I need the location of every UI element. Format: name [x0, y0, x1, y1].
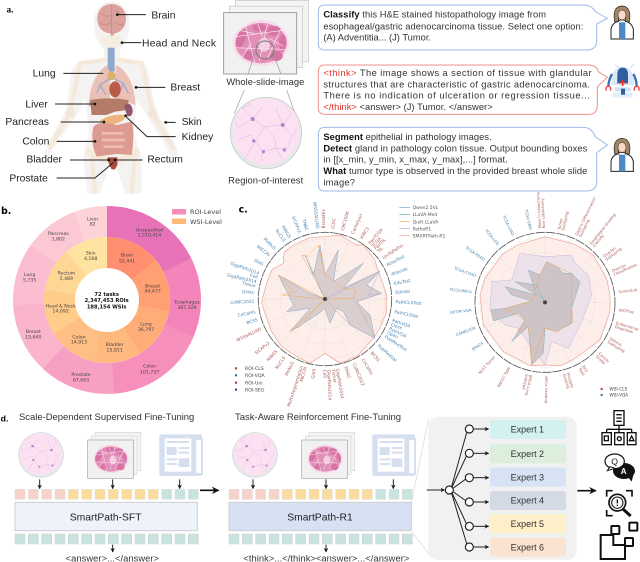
- panel label d: d.: [1, 413, 8, 423]
- radial task labels: PathCLSTest: [395, 299, 422, 307]
- donut labels: 36,797: [138, 327, 154, 333]
- radial task labels: Grade: [595, 354, 607, 366]
- radial task labels: TumorSub: [617, 287, 638, 294]
- prompt bubble: classify: Classify this H&E stained histopathology image from: [323, 10, 546, 20]
- response bubble: think: There is no indication of ulceration or regression tissue...: [323, 91, 590, 101]
- expert panel: Expert 1: [511, 425, 544, 435]
- donut labels: 82: [90, 222, 96, 228]
- organ labels with leader lines: Skin: [182, 117, 202, 128]
- radial task labels: OPTIM VQA: [450, 307, 472, 315]
- expert panel: [427, 417, 577, 560]
- title: scale-dependent supervised fine-tuning: Scale-Dependent Supervised Fine-Tuning: [19, 412, 194, 423]
- radial task labels: Open: [386, 330, 399, 340]
- task type legend: ROI-VQA: [245, 373, 266, 379]
- donut labels: Unspecified: [136, 228, 163, 234]
- radial task labels: Subtype: [521, 374, 530, 391]
- radial task labels: PLCO-BRCA: [450, 287, 472, 294]
- prompt bubble: segment, detect, what: Detect gland in pathology colon tissue. Output bounding boxes: [323, 143, 588, 153]
- radial task labels: GigaPath2014: [334, 368, 344, 399]
- model legend: PathoR1: [413, 226, 431, 232]
- organ labels with leader lines: Colon: [22, 137, 50, 148]
- prompt bubble: classify: (A) Adventitia... (J) Tumor.: [323, 33, 431, 43]
- title: task-aware reinforcement fine-tuning: Task-Aware Reinforcement Fine-Tuning: [235, 412, 401, 423]
- radial task labels: TCGA-READ: [464, 245, 486, 262]
- organ labels with leader lines: Kidney: [182, 132, 214, 143]
- whole-slide-image stack: Whole-slide-image: [226, 77, 304, 87]
- donut center text: [75, 269, 138, 331]
- donut labels: Esophagus: [174, 300, 200, 306]
- prompt bubble: segment, detect, what: image?: [323, 177, 355, 187]
- donut labels: 4,168: [84, 256, 97, 262]
- expert panel: Expert 6: [511, 542, 544, 552]
- prompt bubble: classify: esophageal/gastric adenocarcinoma tissue. Select one option:: [323, 21, 583, 31]
- donut labels: [23, 217, 200, 383]
- radial task labels: Cancer: [598, 351, 611, 364]
- task type legend: WSI-CLS: [609, 387, 628, 393]
- radial task labels: BRCA Lung: [524, 375, 534, 396]
- donut center text: 72 tasks: [94, 292, 119, 298]
- response bubble: think: </think> <answer> (J) Tumor. </answer>: [323, 102, 493, 112]
- model legend: [399, 205, 446, 239]
- panel label c: c.: [239, 205, 248, 216]
- stage: SmartPath-SFT: SmartPath-SFT: [70, 512, 142, 523]
- radial task labels: MICCAI: [255, 244, 271, 258]
- donut outer ring: ROI-level: [0, 189, 218, 411]
- expert panel: Expert 3: [511, 472, 544, 482]
- task type legend: ROI-Uni: [245, 380, 263, 386]
- radial task labels: RINGS: [266, 349, 279, 363]
- radial task labels: Mass in Lobectomy: [535, 192, 542, 229]
- panel b: donut chart: [0, 189, 222, 411]
- radial task labels: NLST Tumor: [477, 354, 497, 375]
- region of interest circle: Region-of-interest: [228, 176, 304, 186]
- radial task labels: RINGS: [280, 225, 292, 240]
- panel label a: a.: [7, 5, 13, 15]
- icon: medical robot: [606, 64, 639, 98]
- model legend: SMARTPath-R1: [413, 233, 446, 239]
- icon: doctor: [611, 6, 633, 39]
- donut labels: Rectum: [57, 271, 76, 277]
- icon: classification hierarchy: [602, 411, 636, 445]
- radial task labels: GigaPath2014: [226, 273, 257, 285]
- panel a: anatomy and data: [5, 0, 308, 193]
- radial task labels: TIL: [375, 245, 385, 255]
- prompt bubble: segment, detect, what: in [[x_min, y_min, x_max, y_max],...] format.: [323, 155, 508, 165]
- icon: doctor: [611, 138, 633, 171]
- panel c: right radar chart: [450, 191, 639, 404]
- model legend: Qwen2.5VL: [413, 205, 439, 211]
- donut labels: 14,913: [71, 339, 87, 345]
- radial task labels: Cell: [249, 272, 258, 281]
- model legend: LLaVA-Med: [413, 212, 437, 218]
- radial task labels: Subtyping: [604, 246, 623, 262]
- radial task labels: Camelyon: [350, 213, 365, 235]
- response bubble: think: <think> The image shows a section of tissue with glandular: [323, 68, 592, 78]
- radial task labels: PanTIL: [374, 238, 387, 251]
- radial task labels: IHCProg: [618, 307, 635, 314]
- donut labels: 5,735: [23, 277, 36, 283]
- radial task labels: BCSS: [246, 317, 259, 326]
- donut labels: Bladder: [106, 342, 124, 348]
- radial task labels: Tumor: [556, 218, 564, 230]
- organ labels with leader lines: Prostate: [9, 173, 48, 184]
- radial task labels: Type: [577, 366, 587, 377]
- radial task labels: AtlasTest: [386, 254, 406, 268]
- icon: question and answer: [605, 454, 635, 482]
- radial task labels: GlaS: [253, 258, 265, 268]
- radial task labels: SICAPv2: [290, 215, 302, 234]
- panel label b: b.: [1, 206, 11, 217]
- radial task labels: PanTCGA: [368, 228, 385, 246]
- stage: SmartPath-SFT: [15, 432, 202, 562]
- radial task labels: MoNuSegmentation: [286, 365, 305, 408]
- radial task labels: Classify: [592, 233, 605, 248]
- radial task labels: NSCLC Type: [496, 365, 511, 388]
- radial task labels: CAMELYON: [455, 325, 476, 337]
- radial task labels: WSSS4LUAD: [311, 202, 320, 230]
- radial task labels: MoNuS: [284, 361, 296, 377]
- radial task labels: PubMedTest: [383, 334, 408, 353]
- donut labels: Breast: [145, 284, 160, 290]
- prompt bubble: classify: [318, 5, 607, 50]
- organ labels with leader lines: Breast: [170, 83, 200, 94]
- radial task labels: GigaPath2014: [229, 262, 260, 277]
- legend: [172, 208, 222, 226]
- response bubble: think: structures that are characteristic of gastric adenocarcinoma.: [323, 79, 590, 89]
- donut labels: Liver: [87, 217, 98, 223]
- donut labels: Colon: [72, 334, 86, 340]
- organ labels with leader lines: Bladder: [26, 155, 62, 166]
- radial task labels: [225, 202, 422, 408]
- illustration: human body with organs: [43, 2, 178, 193]
- radial task labels: Prostate: [566, 372, 575, 388]
- task type legend: ROI-SEG: [245, 387, 265, 393]
- radial task labels: Tissue: [330, 368, 338, 384]
- radial task labels: DHAC: [242, 289, 255, 296]
- radial task labels: Gastric Differentiation: [574, 196, 597, 236]
- donut labels: Colon: [143, 364, 156, 370]
- donut labels: Prostate: [71, 372, 91, 378]
- radial task labels: TCGA: [370, 236, 383, 250]
- radial task labels: Close: [390, 322, 403, 332]
- donut labels: 14,092: [53, 309, 69, 315]
- donut labels: 52,441: [119, 258, 135, 264]
- prompt bubble: segment, detect, what: Segment epithelial in pathology images.: [323, 132, 492, 142]
- donut labels: 1,802: [52, 236, 65, 242]
- radial task labels: BRCA Grading: [544, 376, 549, 404]
- radial task labels: PathVQA: [391, 319, 411, 330]
- region of interest circle: [228, 90, 304, 186]
- donut center text: 188,154 WSIs: [87, 304, 127, 310]
- radial task labels: NuCLS: [274, 355, 287, 370]
- radial task labels: NuCLS: [274, 228, 287, 243]
- donut labels: 44,477: [145, 289, 161, 295]
- prompt bubble: segment, detect, what: What tumor type is observed in the provided breast whole slide: [323, 166, 587, 176]
- panel d: expert routing: [412, 411, 637, 560]
- donut labels: 367,329: [177, 305, 197, 311]
- radial task labels: CoCaHis: [237, 309, 257, 319]
- arrow between stages: [200, 488, 219, 493]
- radial task labels: MICCAI: [299, 366, 309, 383]
- radial task labels: ICDC: [330, 218, 338, 229]
- radial task labels: CRC100K: [340, 210, 351, 231]
- donut labels: Lung: [24, 272, 35, 278]
- radial task labels: PubMedVal: [376, 343, 398, 364]
- donut inner ring: WSI-level: [40, 233, 174, 367]
- response bubble: think: [318, 65, 607, 114]
- radial task labels: GlaS: [310, 368, 318, 379]
- donut labels: Pancreas: [48, 231, 69, 237]
- icon: segmentation blocks: [601, 523, 637, 559]
- model legend: Quilt LLaVA: [413, 219, 439, 225]
- organ labels with leader lines: Lung: [33, 69, 56, 80]
- panel a: chat prompts: [318, 5, 639, 191]
- radial task labels: Esophageal Grading: [588, 212, 617, 245]
- radial task labels: TNBC: [300, 218, 309, 232]
- radial task labels: Subtyping: [577, 218, 591, 238]
- radial task labels: KIRC3: [359, 226, 371, 240]
- radial task labels: UniToPatho: [381, 243, 405, 261]
- radial task labels: [450, 191, 639, 404]
- icon: detection magnifier: [607, 491, 632, 516]
- radial task labels: BreakHis: [321, 208, 327, 228]
- radial task labels: MoNuS: [262, 237, 277, 252]
- radial task labels: CoCaHis: [360, 358, 375, 377]
- radial task labels: WSSS4LUAD: [236, 326, 263, 344]
- task type legend: WSI-VQA: [609, 392, 628, 398]
- task type legend: ROI-CLS: [245, 366, 264, 372]
- organ labels with leader lines: Liver: [25, 100, 48, 111]
- radial task labels: BRACS: [471, 340, 485, 352]
- radial task labels: CoNIC2022: [230, 299, 255, 306]
- donut center text: 2,347,453 ROIs: [85, 298, 129, 304]
- stage: SmartPath-R1: [229, 432, 415, 562]
- radar plot: [475, 232, 615, 372]
- organ labels with leader lines: Pancreas: [5, 117, 49, 128]
- donut labels: Brain: [121, 252, 133, 258]
- icon: question and answer: Q: [611, 456, 618, 466]
- radial task labels: Classification: [613, 262, 638, 277]
- radial task labels: Subtyping: [560, 210, 569, 231]
- radial task labels: Glioma: [609, 336, 623, 347]
- radial task labels: Grading: [562, 373, 571, 390]
- radial task labels: TCGA-GBM: [524, 208, 533, 230]
- donut labels: Lung: [140, 322, 152, 328]
- radial task labels: CoNIC2022: [351, 362, 366, 387]
- donut labels: 5,489: [60, 276, 73, 282]
- panel d: fine-tuning pipeline: [1, 412, 415, 562]
- donut labels: 1,510,414: [137, 232, 161, 238]
- donut labels: Head & Neck: [45, 304, 76, 310]
- radial task labels: EduVal: [395, 289, 410, 296]
- radial task labels: GigaPath2014: [325, 370, 332, 400]
- legend: WSI-Level: [190, 218, 222, 226]
- radial task labels: Ovarian: [602, 246, 617, 259]
- panel c: left radar chart: [225, 202, 446, 408]
- stage: SmartPath-R1: SmartPath-R1: [287, 512, 353, 523]
- task type legend: [600, 387, 628, 398]
- donut labels: Breast: [26, 329, 41, 335]
- zoom guide lines: [412, 420, 432, 557]
- radial task labels: Cell: [321, 370, 327, 378]
- radar plot: [258, 232, 392, 366]
- radial task labels: Ovarian: [611, 262, 627, 273]
- organ labels with leader lines: Rectum: [147, 155, 183, 166]
- radial task labels: Diagnosis: [614, 324, 634, 334]
- radial task labels: Endometrial: [615, 320, 639, 332]
- task type legend: [235, 366, 266, 393]
- expert panel: Expert 5: [511, 519, 544, 529]
- organ labels with leader lines: Head and Neck: [142, 38, 217, 49]
- radial task labels: RCC: [581, 364, 589, 374]
- radial task labels: TCGA-COAD: [453, 265, 477, 278]
- radial task labels: SICAPv2: [254, 340, 272, 356]
- radial task labels: Tissue: [240, 280, 256, 289]
- radial task labels: PathVQA: [388, 327, 407, 340]
- radial task labels: DHAC: [343, 366, 352, 379]
- donut labels: 15,811: [107, 347, 123, 353]
- donut labels: 15,640: [25, 334, 42, 340]
- radial task labels: TCGA-LGG: [483, 227, 501, 246]
- radial task labels: Subtyping: [607, 339, 626, 354]
- radial task labels: TCGA-LUAD: [501, 214, 516, 236]
- radial task labels: EduTest: [393, 278, 411, 287]
- radial task labels: BCSS: [369, 351, 381, 363]
- legend: ROI-Level: [190, 208, 221, 216]
- whole-slide-image stack: [224, 0, 308, 87]
- expert panel: Expert 4: [511, 496, 544, 506]
- organ labels with leader lines: [5, 10, 217, 184]
- arrow to task icons: [577, 488, 596, 493]
- radial task labels: PathCLSVal: [394, 309, 419, 320]
- radial task labels: Non-Lobectomy: [540, 197, 546, 228]
- expert panel: Expert 2: [511, 449, 544, 459]
- radial task labels: AtlasVal: [390, 266, 409, 278]
- donut labels: Skin: [86, 250, 96, 256]
- prompt bubble: segment, detect, what: [318, 127, 607, 191]
- donut labels: 67,663: [73, 377, 89, 383]
- icon: question and answer: A: [621, 467, 627, 476]
- organ labels with leader lines: Brain: [151, 10, 176, 21]
- donut labels: 101,737: [140, 369, 159, 375]
